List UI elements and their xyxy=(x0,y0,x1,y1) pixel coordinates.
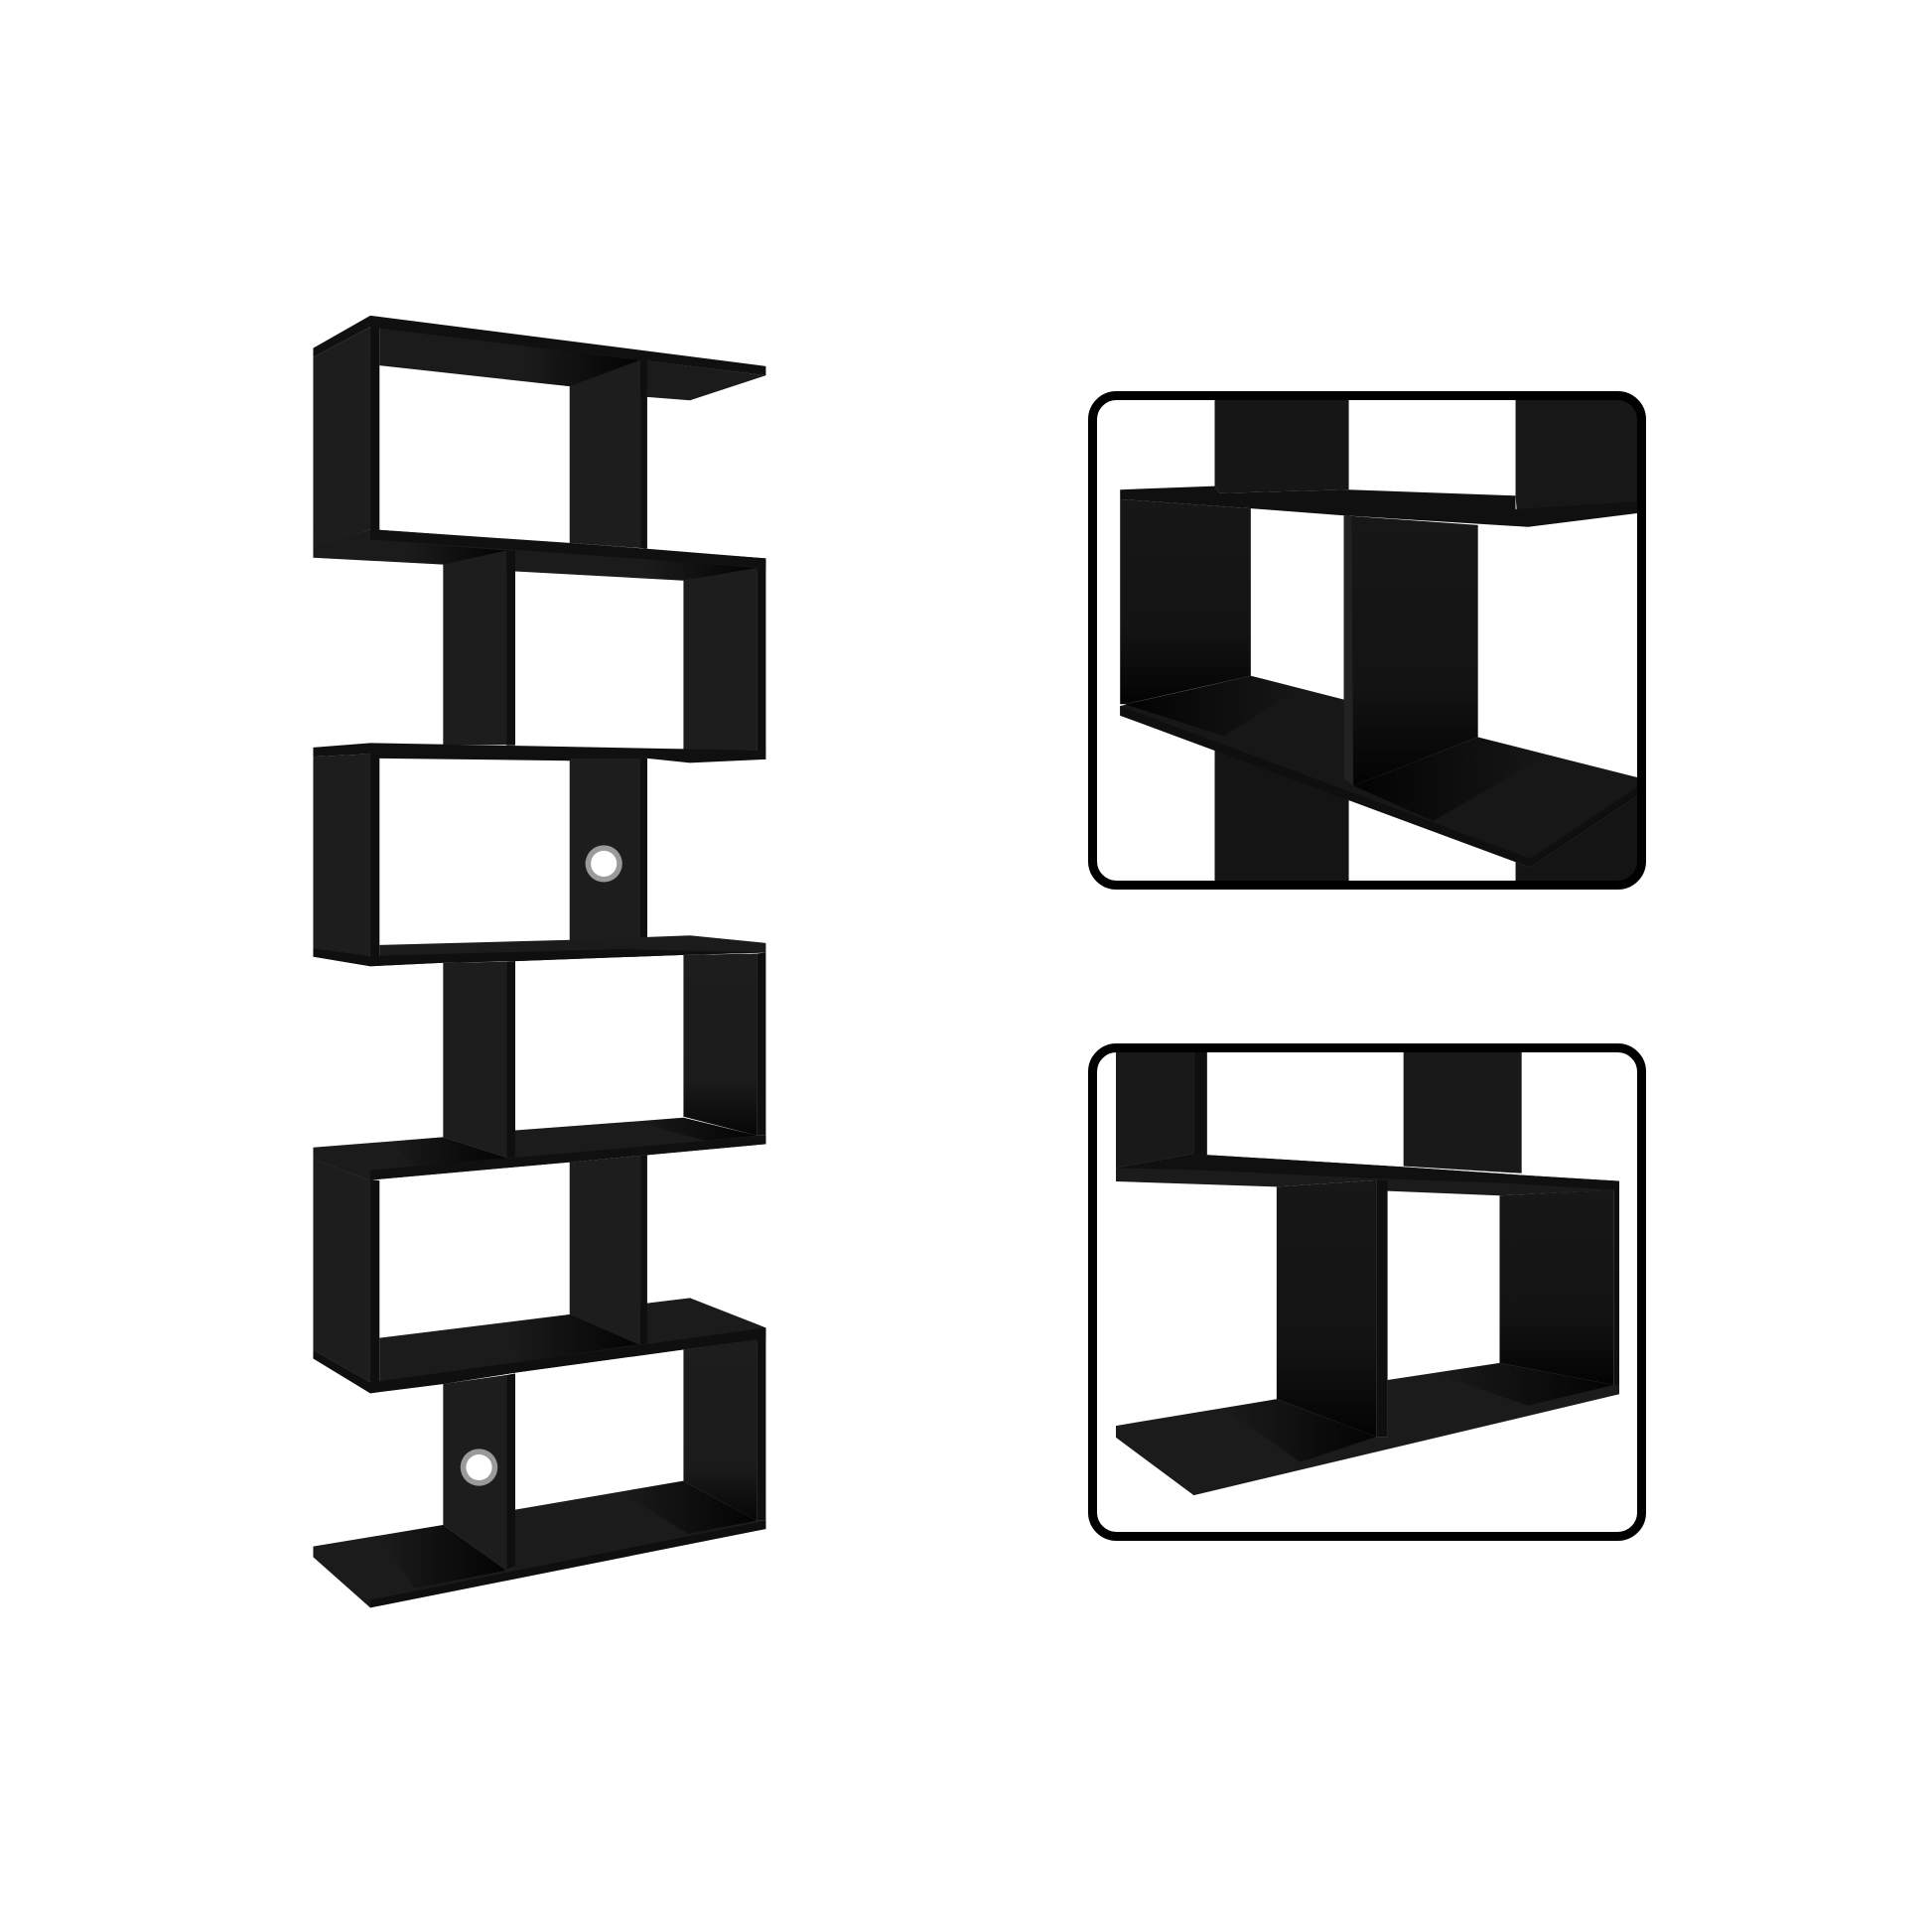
shelf board 6 xyxy=(313,1298,765,1393)
lower shelf board xyxy=(1120,676,1642,868)
middle shelf board xyxy=(1120,486,1642,527)
bottom left panel xyxy=(1215,751,1349,881)
panel under shelf 2, right xyxy=(683,568,765,752)
panel: detail view bottom xyxy=(1092,1047,1642,1537)
center panel 5 xyxy=(570,1155,647,1345)
shelf board 1 xyxy=(313,316,765,400)
icon: cable grommet ring xyxy=(461,1449,497,1486)
side panel 1 xyxy=(313,327,379,549)
center panel 4 xyxy=(443,961,515,1158)
right panel 4 xyxy=(683,952,765,1136)
upper right panel xyxy=(1516,396,1642,510)
shelf board 4 xyxy=(313,935,765,966)
shelf board 7 (base) xyxy=(313,1481,765,1607)
shelf board 5 xyxy=(313,1118,765,1180)
middle shelf board xyxy=(1116,1154,1619,1195)
cropped shelf detail xyxy=(1116,1047,1619,1495)
panel: full bookshelf xyxy=(313,316,765,1607)
side panel 5 xyxy=(313,1159,379,1383)
panel: detail view top xyxy=(1092,395,1642,889)
center panel 3 with cable hole xyxy=(570,759,647,946)
cropped shelf detail xyxy=(1120,396,1642,889)
bottom shelf board xyxy=(1116,1363,1619,1495)
right panel xyxy=(1499,1190,1619,1385)
center panel xyxy=(1344,515,1478,785)
center panel 1 xyxy=(570,360,647,549)
rounded frame xyxy=(1092,395,1642,886)
product illustration canvas xyxy=(313,316,1646,1608)
panel under shelf 2, center xyxy=(443,550,515,746)
bottom tiers of bookshelf xyxy=(313,1155,765,1607)
upper center panel xyxy=(1404,1047,1522,1173)
center panel 6 with cable hole xyxy=(443,1373,515,1571)
side panel 3 xyxy=(313,754,379,956)
lower tiers of bookshelf xyxy=(313,754,765,1180)
shelf board 3 xyxy=(313,743,765,762)
upper tiers of bookshelf xyxy=(313,316,765,762)
center panel xyxy=(1277,1180,1388,1437)
rounded frame xyxy=(1092,1048,1642,1537)
shelf board 2 xyxy=(313,529,765,581)
upper left panel xyxy=(1116,1047,1207,1168)
upper left panel xyxy=(1214,396,1349,493)
left panel xyxy=(1120,499,1251,704)
right panel 6 xyxy=(683,1338,765,1521)
icon: cable grommet ring xyxy=(586,845,622,883)
bottom right panel xyxy=(1515,796,1637,881)
